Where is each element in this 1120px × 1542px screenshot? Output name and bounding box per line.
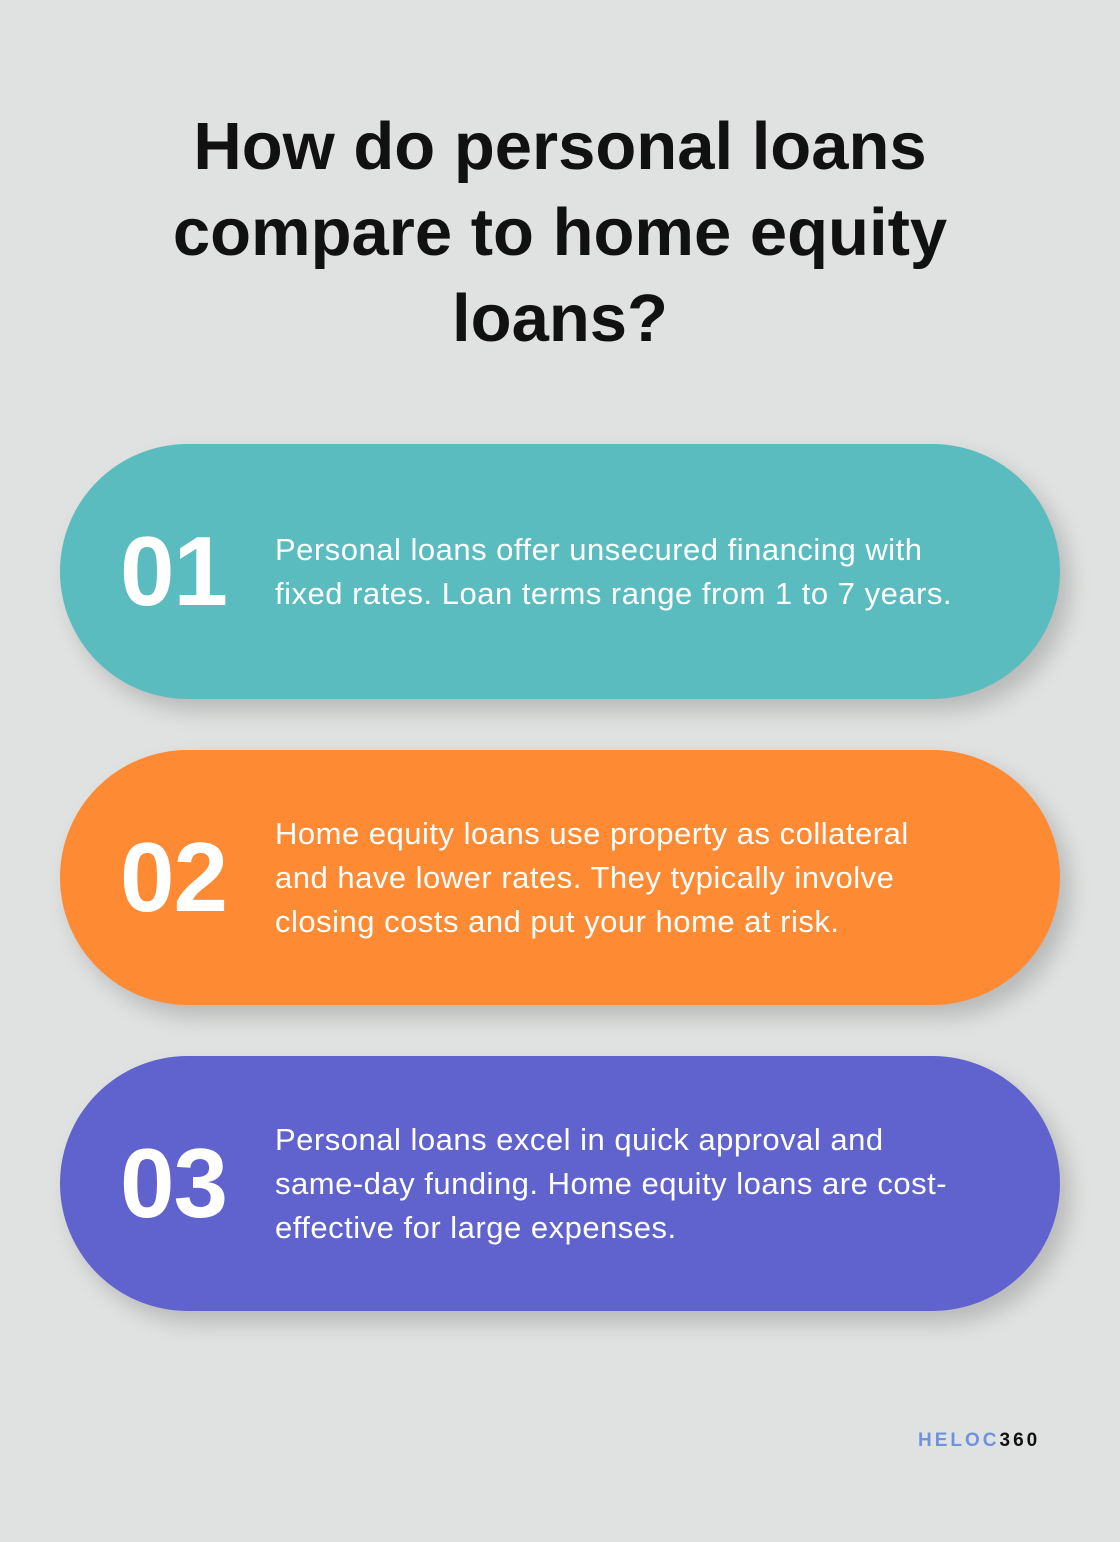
text 02: Home equity loans use property as collateral [275, 816, 909, 850]
card 03 [60, 1056, 1060, 1311]
text 03: effective for large expenses. [275, 1210, 677, 1244]
text 03 [275, 1122, 947, 1244]
text 01 [275, 532, 952, 610]
text 03: Personal loans excel in quick approval and [275, 1122, 884, 1156]
logo: HELOC360 [918, 1430, 1040, 1451]
text 01: fixed rates. Loan terms range from 1 to 7 years. [275, 576, 952, 610]
card 01 [60, 444, 1060, 699]
number 03: 03 [120, 1128, 227, 1238]
text 02 [275, 816, 909, 938]
text 03: same-day funding. Home equity loans are cost- [275, 1166, 947, 1200]
text 02: and have lower rates. They typically involve [275, 860, 894, 894]
title: compare to home equity [173, 195, 947, 270]
card 02 [60, 750, 1060, 1005]
text 01: Personal loans offer unsecured financing with [275, 532, 922, 566]
title [173, 109, 947, 356]
title: loans? [452, 281, 668, 356]
title: How do personal loans [193, 109, 927, 184]
number 02: 02 [120, 822, 227, 932]
text 02: closing costs and put your home at risk. [275, 904, 839, 938]
number 01: 01 [120, 516, 227, 626]
